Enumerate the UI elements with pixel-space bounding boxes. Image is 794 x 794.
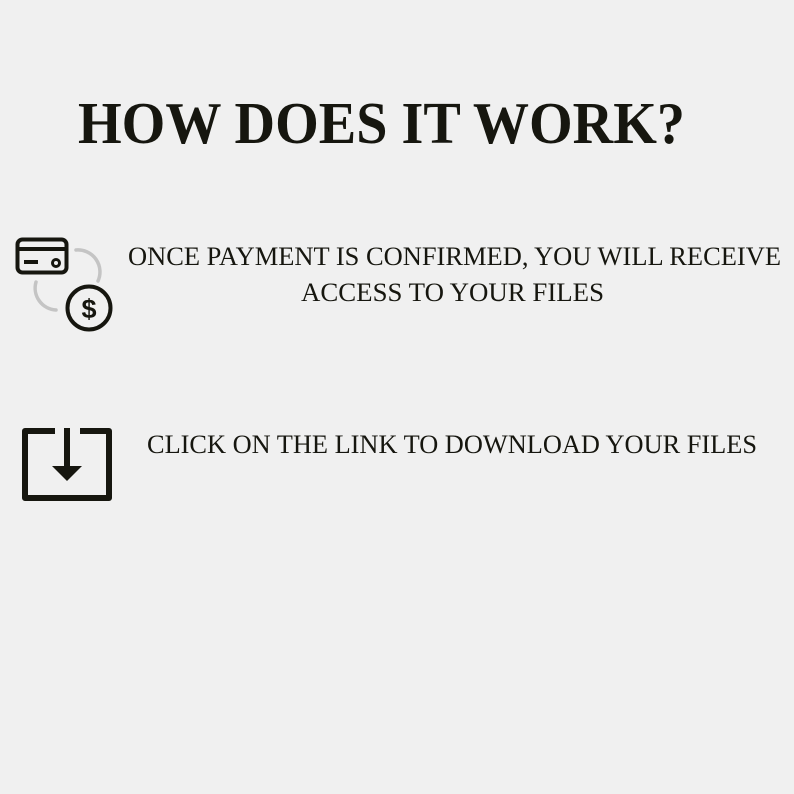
text: step 1: ONCE PAYMENT IS CONFIRMED, YOU WILL RECEIVE	[128, 242, 781, 271]
icon: card and dollar payment	[17, 240, 110, 330]
text: step 1: ACCESS TO YOUR FILES	[301, 278, 604, 307]
icon: card and dollar payment: $	[81, 294, 97, 324]
text: step 1	[128, 242, 781, 307]
icon: download	[25, 428, 109, 498]
text: step 2: CLICK ON THE LINK TO DOWNLOAD YOUR FILES	[147, 430, 757, 459]
title: HOW DOES IT WORK?	[78, 90, 685, 156]
